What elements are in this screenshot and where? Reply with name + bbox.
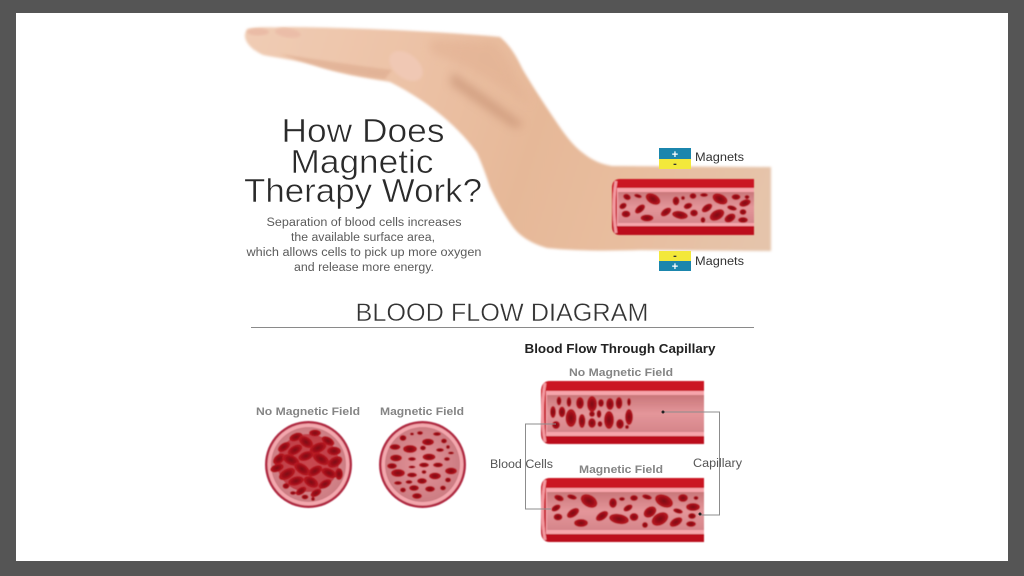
- forearm capillary illustration: [612, 179, 754, 235]
- icon: bottom magnet: -: [673, 250, 677, 262]
- cross-section: no magnetic field: [265, 421, 352, 508]
- label: bottom magnets: Magnets: [695, 256, 744, 268]
- label: magnetic field cross-section: Magnetic Field: [380, 406, 464, 418]
- cross-section: magnetic field: [379, 421, 466, 508]
- clumped blood cells: [269, 430, 344, 501]
- capillary: magnetic field: [541, 478, 704, 542]
- text block: explanation: which allows cells to pick up more oxygen: [245, 247, 482, 259]
- text block: explanation: the available surface area,: [291, 232, 435, 244]
- packed blood cells: [550, 396, 633, 429]
- title: How Does: [282, 112, 444, 149]
- icon: second finger nail: [247, 28, 269, 36]
- connector: blood cells: [526, 424, 556, 509]
- title: Therapy Work?: [244, 172, 482, 209]
- icon: top magnet: -: [673, 158, 677, 170]
- connector: capillary: [662, 410, 720, 516]
- label: magnetic field capillary: Magnetic Field: [579, 464, 663, 476]
- text block: explanation: Separation of blood cells increases: [266, 217, 462, 229]
- shading: back of hand: [430, 40, 530, 105]
- separated blood cells: [550, 491, 700, 529]
- shading: finger crease: [280, 54, 392, 79]
- blood cells: [618, 191, 752, 224]
- text block: explanation: [245, 217, 482, 274]
- label: capillary: Capillary: [693, 458, 742, 470]
- capillary: no magnetic field: [541, 381, 704, 444]
- title: [244, 112, 482, 209]
- heading: blood flow diagram: BLOOD FLOW DIAGRAM: [356, 299, 648, 327]
- shading: hand crease: [450, 72, 524, 128]
- text block: explanation: and release more energy.: [294, 262, 434, 274]
- icon: top magnet: +: [672, 149, 678, 161]
- icon: top magnet: [659, 148, 691, 170]
- label: no magnetic field cross-section: No Magnetic Field: [256, 406, 360, 418]
- title: Magnetic: [290, 143, 434, 180]
- icon: thumb nail: [384, 45, 428, 87]
- icon: finger nail: [275, 27, 301, 39]
- label: no magnetic field capillary: No Magnetic Field: [569, 367, 673, 379]
- illustration: hand and forearm: [245, 27, 771, 251]
- separated blood cells: [387, 431, 457, 499]
- label: blood cells: Blood Cells: [490, 459, 553, 471]
- label: top magnets: Magnets: [695, 152, 744, 164]
- icon: bottom magnet: +: [672, 261, 678, 273]
- heading: blood flow through capillary: Blood Flow Through Capillary: [524, 342, 716, 356]
- icon: bottom magnet: [659, 250, 691, 273]
